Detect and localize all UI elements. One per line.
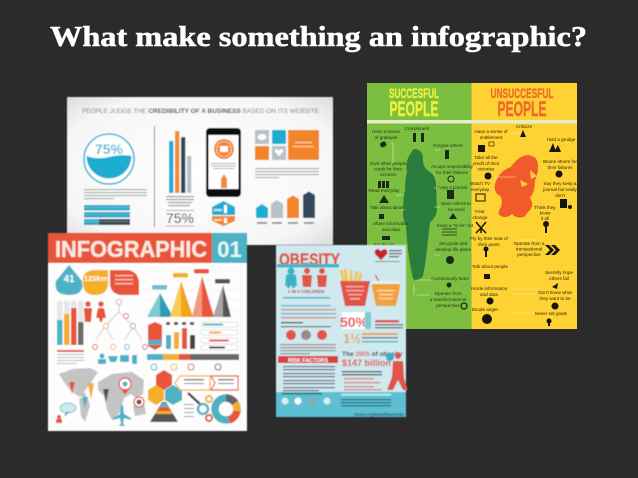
unsuccessful labels: Fly by their seat of [470,236,508,241]
unsuccessful labels: their pants [478,242,500,247]
successful labels: develop life plans [435,247,471,252]
unsuccessful labels: their failures [547,165,573,170]
footer text: heart.org/HealthierKids [354,412,404,417]
successful labels: of gratitude [374,135,398,140]
hexagons [148,370,182,405]
risk icons [286,330,327,340]
airplane [113,405,131,426]
bar chart [169,131,191,193]
unsuccessful labels: others fail [549,276,569,281]
subheading bar [277,264,339,268]
successful labels: Share information [373,221,410,226]
droplet stats [56,265,139,295]
water gauge 75%: 75% [95,141,124,157]
unsuccessful labels: Horde information [471,286,508,291]
cost headline [342,351,403,368]
successful labels: Give other people [370,161,407,166]
successful labels: Forgive others [433,143,463,148]
device icons [98,354,137,364]
unsuccessful labels: Say they keep a [544,181,577,186]
successful labels: Keep a journal [437,185,467,190]
unsuccessful labels: Don't know what [538,290,573,295]
pyramid legend [184,404,194,417]
panel: infographic 01 [48,233,247,431]
risk factors bar [278,356,338,364]
unsuccessful labels: Hold a grudge [547,137,576,142]
tag labels [175,376,238,390]
unsuccessful labels: Talk about people [472,264,508,269]
progress pills [201,322,238,350]
small stat block [148,322,195,350]
unsuccessful labels: Criticize [516,124,533,129]
footer band [276,392,406,417]
heading: successful [389,85,439,121]
unsuccessful labels: change [472,215,488,220]
successful labels: perspective [436,303,460,308]
risk list [283,366,335,391]
cost headline: $147 billion [342,358,391,368]
gauge caption [84,189,147,199]
people icon grid [84,205,130,225]
successful labels: a transformational [430,297,466,302]
successful labels: Accept responsibility [431,164,474,169]
successful labels: credit for their [374,166,403,172]
banner: 01 [217,237,242,262]
bars [57,301,84,345]
panel: successful vs unsuccessful people [367,83,578,329]
successful labels: Exude joy [374,242,395,247]
wrench and gears [188,393,212,421]
heading: successful: PEOPLE [390,98,438,121]
successful labels: victories [380,172,397,177]
caption [57,350,84,364]
successful labels: Want others to [441,201,471,206]
world map [59,368,146,422]
unsuccessful labels: Watch TV [470,181,491,186]
panel: website credibility infographic [67,97,333,245]
successful labels: Set goals and [439,241,467,246]
obesity heading: OBESITY [279,250,341,269]
unsuccessful labels: Take all the [474,155,498,160]
1 1/2 stat: 1½ [343,331,361,346]
successful labels [369,126,474,308]
triangle chart [142,269,240,317]
unsuccessful labels: Operate from a [514,241,545,246]
successful labels: Operate from [434,291,462,296]
risk factors bar: RISK FACTORS [288,358,328,364]
cost headline: The 2005 of obesity [342,351,403,358]
50% box: 50% [340,314,369,330]
colour ribbon [147,354,239,370]
speech bubble [60,403,76,417]
unsuccessful labels: Exude anger [472,307,498,312]
unsuccessful labels: it all [541,216,549,221]
unsuccessful labels: credit of their [473,161,500,166]
tile mosaic [255,130,319,160]
layered pyramid [150,402,178,422]
heading: unsuccessful: PEOPLE [498,98,546,121]
silhouette: woman [403,149,437,280]
heading: successful: SUCCESFUL [389,85,439,101]
unsuccessful labels: perspective [517,252,541,257]
heart logo [375,249,402,262]
heading: unsuccessful: UNSUCCESFUL [490,85,554,101]
unsuccessful labels: journal but really [542,187,578,192]
successful labels: for their failures [436,170,469,175]
unsuccessful labels: don't [555,193,566,198]
unsuccessful labels: Have a sense of [474,129,508,134]
unsuccessful labels: Never set goals [535,311,568,316]
1 1/2 stat [343,331,398,346]
unsuccessful labels: entitlement [480,135,503,140]
yellow half [472,83,577,329]
water gauge 75% [84,134,134,184]
successful labels: Continuously learn [431,276,469,281]
bar chart caption [166,196,194,206]
text: of teenagers [375,320,403,328]
cost text [342,371,382,390]
successful labels: succeed [447,207,465,212]
hexagon badges [212,201,235,226]
map pins [69,378,144,408]
fries and cup [340,269,400,306]
successful labels: Keep a "to be" list [437,223,474,228]
child figures [285,268,327,288]
footer icons [282,393,330,404]
unsuccessful labels [470,124,578,316]
paragraph [280,344,336,354]
silhouette: crouching man [495,155,538,218]
connector lines [391,143,440,295]
unsuccessful labels: Think they [534,205,556,210]
unsuccessful labels: Fear [475,209,485,214]
successful labels: and data [382,227,400,232]
smartphone [206,128,241,197]
running figure [386,353,408,390]
unsuccessful labels: and data [480,292,498,297]
panel heading: PEOPLE JUDGE THE CREDIBILITY OF A BUSINESS BASED ON ITS WEBSITE [82,108,319,115]
tree diagram [92,299,148,350]
unsuccessful labels: Secretly hope [545,270,573,275]
unsuccessful labels: victories [478,166,495,172]
house bars [256,192,315,224]
unsuccessful labels: everyday [471,187,490,192]
mosaic caption [255,168,319,178]
unsuccessful labels: they want to be [539,296,571,301]
donut chart [215,398,237,420]
unsuccessful labels: know [540,210,551,216]
unsuccessful icons [476,130,572,326]
couple icons [84,301,106,322]
green half [367,83,472,329]
statistic 75%: 75% [166,210,194,226]
droplet stats: 125km [84,274,108,283]
text block [281,297,336,327]
person badge [56,415,62,423]
successful labels: Compliment [405,126,430,131]
successful labels: Have a sense [372,129,400,134]
unsuccessful labels: transactional [516,246,542,252]
panel: obesity [276,245,408,417]
title: What make something an infographic? [50,21,587,53]
statistic: 1 IN 3 CHILDREN [288,289,324,294]
footer text [341,394,404,417]
unsuccessful labels: Blame others for [543,159,577,164]
banner: INFOGRAPHIC [55,236,207,262]
successful icons [378,133,467,309]
droplet stats: 41 [63,274,75,285]
successful labels: Talk about ideas [370,205,404,210]
heading: unsuccessful [490,85,554,121]
successful labels: Read everyday [369,188,400,193]
